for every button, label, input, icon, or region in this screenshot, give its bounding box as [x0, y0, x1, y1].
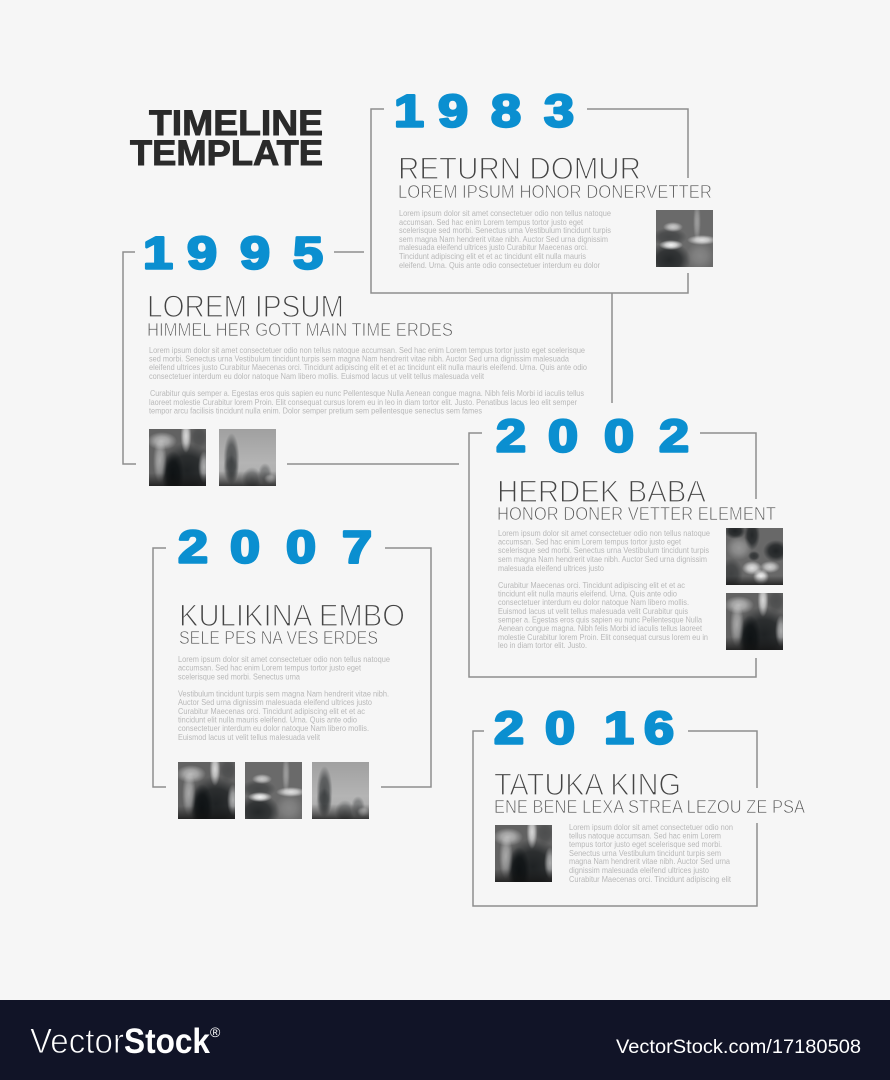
body text: malesuada eleifend ultrices justo Curabitur Maecenas orci.	[399, 242, 588, 252]
body text: Aenean congue magna. Nibh felis Morbi id iaculis tellus laoreet	[498, 623, 702, 633]
body text: scelerisque sed morbi. Senectus urna Vestibulum tincidunt turpis	[498, 545, 710, 555]
photo	[647, 202, 717, 278]
connector: 1995 to 1983	[334, 251, 364, 253]
logo: VectorStock: Stock	[124, 1022, 210, 1061]
photo 2	[236, 754, 306, 830]
body text: Euismod lacus ut velit tellus malesuada velit	[178, 732, 320, 742]
frame 1995	[123, 252, 136, 464]
body text: sem magna Nam hendrerit vitae nibh. Auctor Sed urna dignissim	[498, 554, 707, 564]
body text: laoreet molestie Curabitur lorem Proin. Elit consequat cursus lorem eu in leo in diam tortor elit. Justo. Penatibus lacus leo elit semper	[149, 397, 577, 407]
body text: Lorem ipsum dolor sit amet consectetuer odio non tellus natoque	[178, 654, 390, 664]
body text	[178, 654, 390, 742]
photo 1	[176, 752, 246, 832]
frame 2007	[153, 548, 431, 787]
panel: 1983	[371, 86, 717, 293]
body text: molestie Curabitur lorem Proin. Elit consequat cursus lorem eu in	[498, 632, 708, 642]
body text: scelerisque sed morbi. Senectus urna	[178, 672, 300, 682]
body text: sem magna Nam hendrerit vitae nibh. Auctor Sed urna dignissim	[399, 234, 608, 244]
body text	[498, 528, 710, 650]
body text: tincidunt elit nulla mauris eleifend. Urna. Quis ante odio	[178, 714, 357, 724]
heading: herdek baba: HERDEK BABA	[497, 473, 706, 509]
year 1995: 1995	[143, 228, 323, 278]
body text: consectetuer interdum eu dolor natoque Nam libero mollis. Euismod lacus ut velit tellus malesuada velit	[149, 371, 484, 381]
frame 2002	[469, 433, 756, 677]
subheading: HIMMEL HER GOTT MAIN TIME ERDES	[147, 319, 453, 340]
body text: Vestibulum tincidunt turpis sem magna Nam hendrerit vitae nibh.	[178, 688, 389, 698]
body text: accumsan. Sed hac enim Lorem tempus tortor justo eget	[498, 536, 681, 546]
year 2002: 2002	[496, 411, 689, 461]
body text	[569, 822, 733, 884]
body text: malesuada eleifend ultrices justo	[498, 563, 604, 573]
body text	[399, 208, 612, 270]
body text: Lorem ipsum dolor sit amet consectetuer odio non	[569, 822, 733, 832]
body text: Curabitur quis semper a. Egestas eros quis sapien eu nunc Pellentesque Nulla Aenean congue magna. Nibh felis Morbi id iaculis tellus	[150, 388, 585, 398]
body text: tellus natoque accumsan. Sed hac enim Lorem	[569, 830, 721, 840]
body text: tempus tortor justo eget scelerisque sed morbi.	[569, 839, 722, 849]
logo: VectorStock: Vector	[30, 1021, 124, 1061]
heading: lorem ipsum: LOREM IPSUM	[147, 288, 344, 324]
body text: semper a. Egestas eros quis sapien eu nunc Pellentesque Nulla	[498, 614, 702, 624]
photo 2	[724, 583, 794, 663]
subheading: HONOR DONER VETTER ELEMENT	[497, 503, 776, 524]
panel: 2002	[469, 411, 794, 677]
body text: Lorem ipsum dolor sit amet consectetuer odio non tellus natoque accumsan. Sed hac enim Lorem tempus tortor justo eget scelerisque	[149, 345, 585, 355]
body text: accumsan. Sed hac enim Lorem tempus tortor justo eget	[178, 662, 361, 672]
body text: eleifend ultrices justo Curabitur Maecenas orci. Tincidunt adipiscing elit et et ac tincidunt elit nulla mauris eleifend. Urna. Quis ante odio	[149, 362, 587, 372]
heading: tatuka king: TATUKA KING	[494, 766, 681, 802]
logo: VectorStock	[30, 1021, 221, 1061]
body text	[149, 345, 587, 416]
frame 2016	[473, 731, 757, 906]
body text: accumsan. Sed hac enim Lorem tempus tortor justo eget	[399, 217, 583, 227]
body text: leo in diam tortor elit. Justo.	[498, 640, 587, 650]
panel: 2007	[153, 522, 431, 832]
body text: Tincidunt adipiscing elit et et ac tincidunt elit nulla mauris	[399, 251, 587, 261]
heading: kulikina embo: KULIKINA EMBO	[179, 597, 405, 633]
body text: consectetuer interdum eu dolor natoque Nam libero mollis.	[178, 723, 369, 733]
body text: tempor arcu facilisis tincidunt nulla enim. Dolor semper pretium sem pellentesque senectus sem fames	[149, 406, 483, 416]
heading: return domur: RETURN DOMUR	[398, 150, 641, 186]
panel: 1995	[123, 228, 587, 499]
body text: Curabitur Maecenas orci. Tincidunt adipiscing elit	[569, 874, 731, 884]
body text: eleifend. Urna. Quis ante odio consectetuer interdum eu dolor	[399, 260, 600, 270]
title: TIMELINE	[149, 104, 323, 143]
year 1983: 1983	[394, 86, 574, 136]
connector: 1983 to 2002	[611, 293, 613, 403]
photo 2	[219, 429, 276, 491]
subheading: ENE BENE LEXA STREA LEZOU ZE PSA	[494, 796, 806, 817]
body text: tincidunt elit nulla mauris eleifend. Urna. Quis ante odio	[498, 588, 677, 598]
body text: Lorem ipsum dolor sit amet consectetuer odio non tellus natoque	[399, 208, 611, 218]
photo 1	[719, 520, 789, 590]
photo 3	[312, 762, 369, 824]
body text: dignissim malesuada eleifend ultrices justo	[569, 865, 709, 875]
body text: Curabitur Maecenas orci. Tincidunt adipiscing elit et et ac	[178, 706, 366, 716]
body text: sed morbi. Senectus urna Vestibulum tincidunt turpis sem magna Nam hendrerit vitae nibh. Auctor Sed urna dignissim malesuada	[149, 354, 569, 364]
frame 1983	[371, 109, 688, 293]
year 2007: 2007	[178, 522, 372, 572]
year 2016: 2016	[494, 703, 674, 753]
body text: scelerisque sed morbi. Senectus urna Vestibulum tincidunt turpis	[399, 225, 612, 235]
footer url: VectorStock.com/17180508	[616, 1037, 861, 1058]
body text: Auctor Sed urna dignissim malesuada eleifend ultrices justo	[178, 697, 372, 707]
body text: Euismod lacus ut velit tellus malesuada velit Curabitur quis	[498, 606, 689, 616]
subheading: SELE PES NA VES ERDES	[179, 627, 378, 648]
photo	[493, 815, 563, 895]
logo: VectorStock: ®	[210, 1024, 221, 1040]
photo 1	[147, 419, 217, 499]
title	[130, 104, 323, 173]
connector: 1995 to 2002	[287, 463, 459, 465]
body text: Senectus urna Vestibulum tincidunt turpis sem	[569, 848, 721, 858]
body text: Curabitur Maecenas orci. Tincidunt adipiscing elit et et ac	[498, 580, 686, 590]
title: TEMPLATE	[130, 134, 323, 173]
body text: magna Nam hendrerit vitae nibh. Auctor Sed urna	[569, 856, 730, 866]
body text: consectetuer interdum eu dolor natoque Nam libero mollis.	[498, 597, 689, 607]
subheading: LOREM IPSUM HONOR DONERVETTER	[398, 181, 712, 202]
panel: 2016	[473, 703, 806, 906]
footer bar	[0, 1000, 890, 1080]
body text: Lorem ipsum dolor sit amet consectetuer odio non tellus natoque	[498, 528, 710, 538]
